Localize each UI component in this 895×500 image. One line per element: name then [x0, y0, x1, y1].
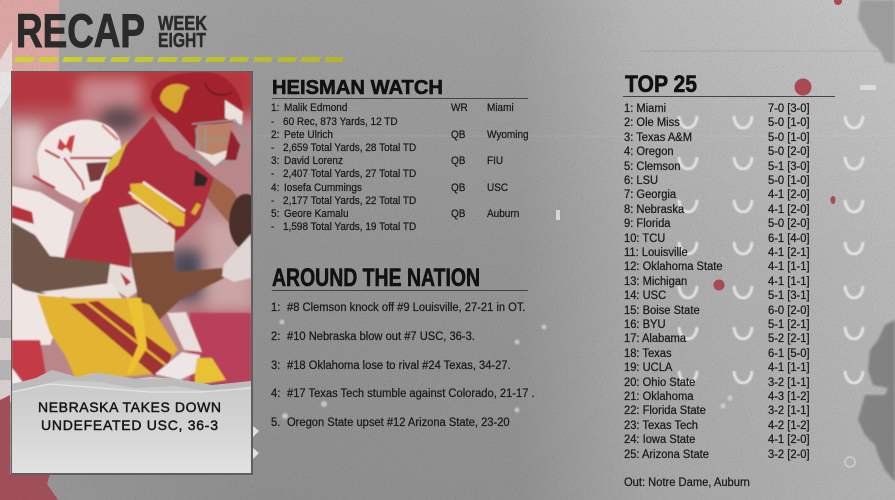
waist white — [40, 283, 122, 298]
heisman watch list: - — [271, 221, 274, 233]
top 25 rankings: 8: Nebraska — [624, 204, 684, 216]
title: RECAP: RECAP — [16, 4, 145, 57]
yellow dashed divider — [14, 57, 344, 62]
top 25 rankings: 6-1 [4-0] — [768, 233, 810, 245]
heisman watch list: - — [271, 116, 274, 128]
usc player right forearm — [206, 176, 238, 223]
top 25 rankings: 4-1 [1-1] — [768, 362, 810, 374]
heisman watch list: 2: — [271, 129, 279, 141]
top 25 rankings: 12: Oklahoma State — [624, 261, 723, 273]
top 25 rankings: 3-2 [1-1] — [768, 405, 810, 417]
photo card — [11, 71, 253, 475]
top 25 rankings: 7: Georgia — [624, 189, 676, 201]
heisman watch list: 1: — [271, 102, 279, 114]
top 25 rankings: 5-1 [2-1] — [768, 319, 810, 331]
heisman watch list: Pete Ulrich — [284, 129, 333, 141]
top 25 rankings: 5-0 [1-0] — [768, 132, 810, 144]
around the nation list: 5. — [271, 417, 280, 429]
usc jersey — [63, 116, 214, 268]
around the nation list: #17 Texas Tech stumble against Colorado, 21-17 . — [287, 388, 535, 400]
heisman watch list: QB — [451, 155, 465, 167]
top 25 rankings: 10: TCU — [624, 233, 665, 245]
top 25 rankings: 6: LSU — [624, 175, 658, 187]
heisman watch list: Miami — [487, 102, 514, 114]
top 25 rankings — [624, 103, 810, 489]
top 25 rankings: 22: Florida State — [624, 405, 706, 417]
heisman watch list: FIU — [487, 155, 503, 167]
around the nation list: #8 Clemson knock off #9 Louisville, 27-21 in OT. — [287, 302, 526, 314]
top 25 rankings: 13: Michigan — [624, 276, 687, 288]
top 25 rankings: 14: USC — [624, 290, 666, 302]
red paint splats — [714, 0, 842, 290]
top 25 rankings: 4-1 [2-0] — [768, 434, 810, 446]
top 25 rankings: 9: Florida — [624, 218, 670, 230]
heisman watch list: 2,659 Total Yards, 28 Total TD — [283, 142, 416, 154]
heisman watch list: 2,407 Total Yards, 27 Total TD — [283, 168, 416, 180]
top 25 rankings: 2: Ole Miss — [624, 117, 680, 129]
around the nation list: #10 Nebraska blow out #7 USC, 36-3. — [287, 331, 475, 343]
top 25 rankings: 20: Ohio State — [624, 377, 695, 389]
top 25 rankings: 5: Clemson — [624, 161, 680, 173]
around the nation list: #18 Oklahoma lose to rival #24 Texas, 34-27. — [287, 360, 511, 372]
around the nation list: Oregon State upset #12 Arizona State, 23-20 — [287, 417, 510, 429]
top 25 rankings: 5-1 [3-1] — [768, 290, 810, 302]
heisman watch list: Malik Edmond — [284, 102, 347, 114]
field hash marks — [280, 85, 876, 467]
top 25 rankings: 1: Miami — [624, 103, 666, 115]
nebraska defender torso — [12, 186, 74, 345]
heisman watch list: Iosefa Cummings — [284, 182, 362, 194]
top 25 rankings: 17: Alabama — [624, 333, 686, 345]
usc upper arm — [130, 251, 224, 322]
top 25 rankings: 4-1 [1-1] — [768, 276, 810, 288]
nebraska helmet — [33, 120, 121, 203]
top 25 rankings: 5-0 [2-0] — [768, 218, 810, 230]
right white sleeve — [167, 312, 202, 352]
subtitle: week eight — [158, 13, 207, 52]
heisman watch list: Auburn — [487, 208, 519, 220]
face and face mask — [196, 122, 232, 155]
right glove on ball — [222, 234, 251, 282]
subtitle: week eight: EIGHT — [158, 30, 206, 52]
heisman watch list: 4: — [271, 182, 279, 194]
around the nation list: 1: — [271, 302, 280, 314]
top 25 rankings: 3-2 [2-0] — [768, 449, 810, 461]
top 25 rankings: Out: Notre Dame, Auburn — [624, 477, 750, 489]
top 25 rankings: 24: Iowa State — [624, 434, 695, 446]
torn paper caption panel — [12, 370, 251, 473]
heisman watch list: 3: — [271, 155, 279, 167]
water stain top right — [858, 0, 895, 64]
top 25 rankings: 23: Texas Tech — [624, 420, 698, 432]
heisman watch list: 5: — [271, 208, 279, 220]
heisman watch list: QB — [451, 208, 465, 220]
top 25 rankings: 25: Arizona State — [624, 449, 709, 461]
heisman watch list: 2,177 Total Yards, 22 Total TD — [283, 195, 416, 207]
heisman watch list: 60 Rec, 873 Yards, 12 TD — [283, 116, 398, 128]
photo: football tackle — [12, 72, 251, 384]
heading: around the nation: AROUND THE NATION — [272, 264, 480, 292]
top 25 rankings: 5-0 [1-0] — [768, 175, 810, 187]
white undersleeve — [119, 204, 175, 253]
top 25 rankings: 7-0 [3-0] — [768, 103, 810, 115]
lower glove — [155, 352, 200, 380]
heisman watch list: Geore Kamalu — [284, 208, 349, 220]
top 25 rankings: 16: BYU — [624, 319, 666, 331]
heisman watch list: - — [271, 142, 274, 154]
top 25 rankings: 4-1 [2-1] — [768, 247, 810, 259]
heading: heisman watch: HEISMAN WATCH — [272, 77, 443, 99]
around the nation list: 4: — [271, 388, 280, 400]
caption text: UNDEFEATED USC, 36-3 — [41, 417, 218, 433]
top 25 rankings: 5-0 [2-0] — [768, 146, 810, 158]
top 25 rankings: 5-0 [1-0] — [768, 117, 810, 129]
heisman watch list: Wyoming — [487, 129, 529, 141]
top 25 rankings: 6-0 [2-0] — [768, 305, 810, 317]
football — [228, 193, 251, 248]
heisman watch list: QB — [451, 129, 465, 141]
subtitle: week eight: WEEK — [158, 13, 207, 35]
heisman watch list — [271, 102, 529, 233]
top 25 rankings: 4-1 [2-0] — [768, 189, 810, 201]
top 25 rankings: 3: Texas A&M — [624, 132, 692, 144]
top 25 rankings: 6-1 [5-0] — [768, 348, 810, 360]
top 25 rankings: 4: Oregon — [624, 146, 674, 158]
heisman watch list: QB — [451, 182, 465, 194]
top 25 rankings: 21: Oklahoma — [624, 391, 693, 403]
heisman watch list: - — [271, 195, 274, 207]
around the nation list: 2: — [271, 331, 280, 343]
top 25 rankings: 3-2 [1-1] — [768, 377, 810, 389]
heisman watch list: - — [271, 168, 274, 180]
heisman watch list: David Lorenz — [284, 155, 343, 167]
top 25 rankings: 15: Boise State — [624, 305, 700, 317]
heisman watch list: WR — [451, 102, 468, 114]
defender glove — [107, 264, 137, 298]
heading: top 25: TOP 25 — [625, 71, 697, 98]
top 25 rankings: 18: Texas — [624, 348, 672, 360]
water stain bottom right — [858, 320, 895, 482]
heisman watch list: USC — [487, 182, 508, 194]
top 25 rankings: 4-1 [2-0] — [768, 204, 810, 216]
caption text — [38, 399, 221, 433]
heisman watch list: 1,598 Total Yards, 19 Total TD — [283, 221, 416, 233]
usc pants — [37, 295, 178, 382]
around the nation list — [271, 302, 535, 429]
around the nation list: 3: — [271, 360, 280, 372]
tackling arm with tattoos — [12, 222, 112, 294]
top 25 rankings: 4-2 [1-2] — [768, 420, 810, 432]
top 25 rankings: 4-1 [1-1] — [768, 261, 810, 273]
top 25 rankings: 5-2 [2-1] — [768, 333, 810, 345]
caption text: NEBRASKA TAKES DOWN — [38, 399, 221, 415]
top 25 rankings: 11: Louisville — [624, 247, 688, 259]
top 25 rankings: 4-3 [1-2] — [768, 391, 810, 403]
top 25 rankings: 19: UCLA — [624, 362, 672, 374]
usc helmet — [151, 72, 248, 166]
top 25 rankings: 5-1 [3-0] — [768, 161, 810, 173]
